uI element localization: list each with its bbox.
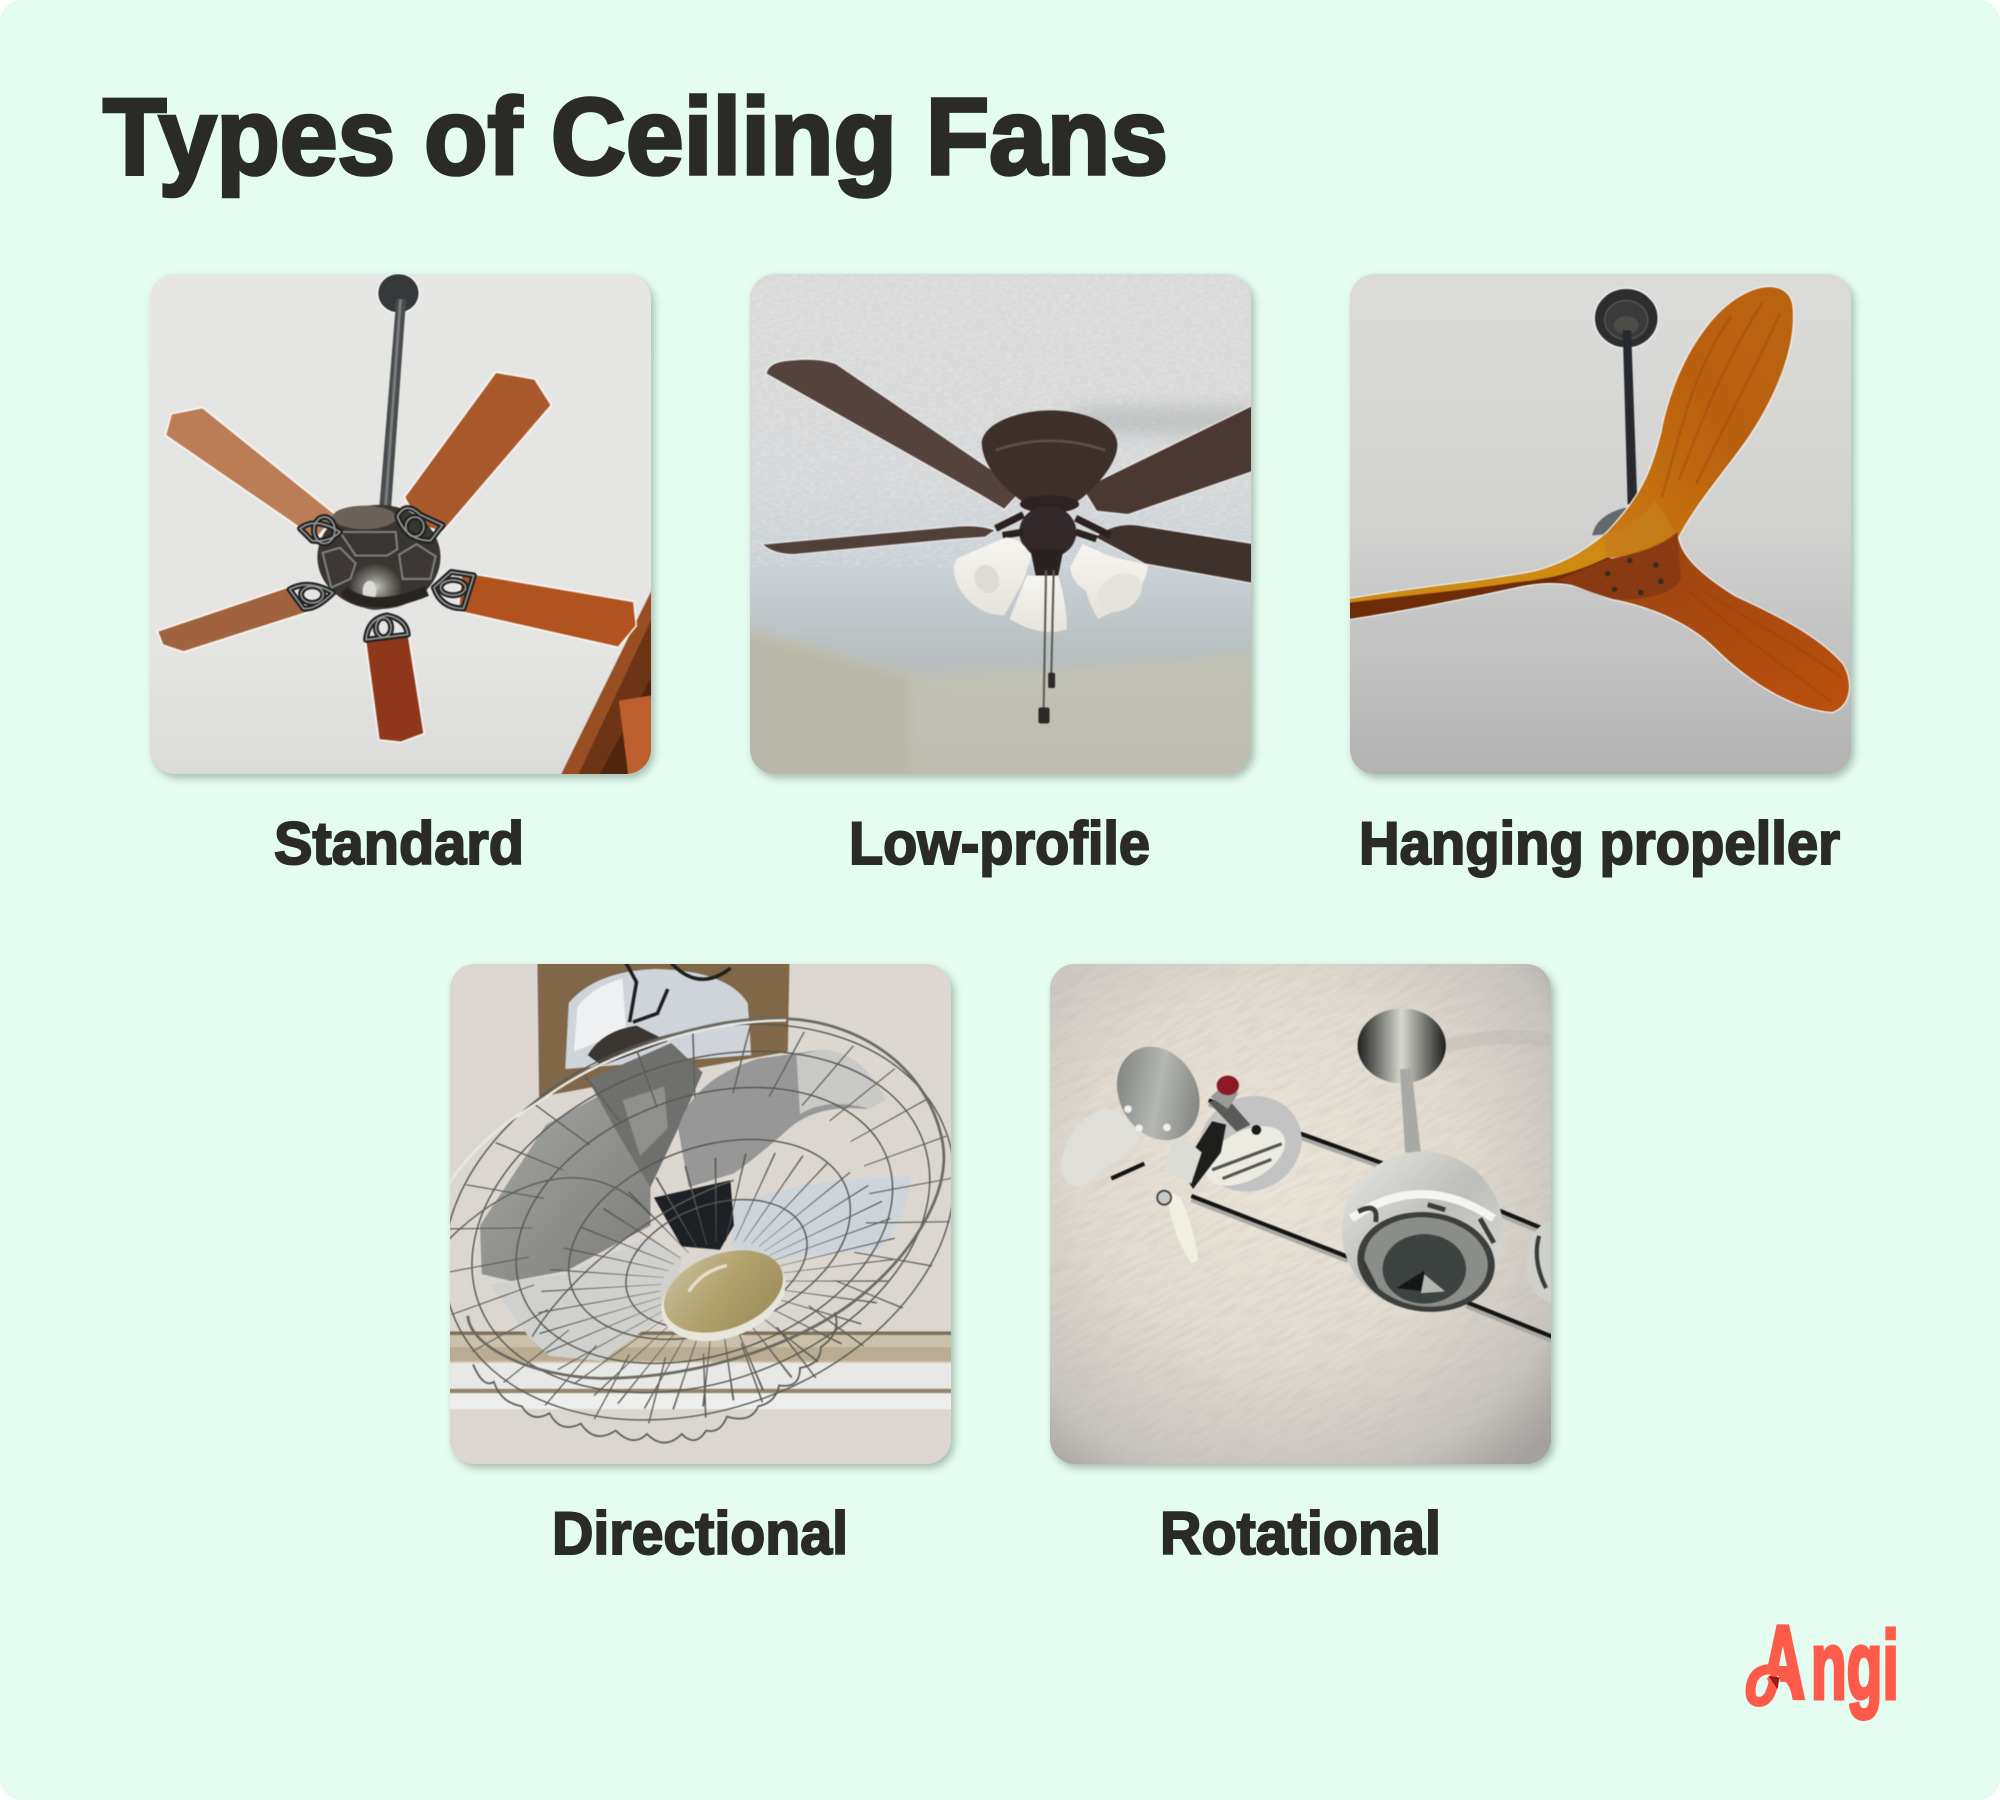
hub cap: [649, 1235, 798, 1357]
panel: directional fan: [448, 964, 958, 1567]
blades: [157, 372, 636, 742]
soft shadow on ceiling: [1076, 407, 1256, 435]
mounting screws: [1605, 558, 1664, 595]
photo: directional ceiling fan: [450, 964, 951, 1464]
label: Standard: Standard: [274, 810, 524, 877]
outer mesh wires: [440, 1004, 959, 1447]
blades: [762, 359, 1256, 584]
label: Low-profile: Low-profile: [849, 810, 1150, 877]
panel: rotational fan: [1048, 964, 1558, 1567]
wood grain: [1662, 303, 1843, 702]
propeller blades: [1345, 287, 1849, 712]
ceiling texture: [745, 268, 1256, 567]
wall: [742, 628, 1260, 782]
canopy and stem: [1358, 1008, 1556, 1152]
support bars: [1111, 1100, 1556, 1343]
mounting bracket: [537, 958, 790, 1097]
central motor: [1342, 1151, 1503, 1319]
fan blades: [480, 1043, 911, 1361]
ceiling beam: [559, 581, 656, 779]
motor housing: [317, 505, 440, 610]
label: Directional: Directional: [552, 1500, 848, 1567]
blade brackets: [290, 508, 474, 640]
ceiling trim: [445, 1331, 956, 1409]
panel: hanging propeller fan: [1348, 274, 1858, 878]
label: Hanging propeller: Hanging propeller: [1359, 810, 1840, 877]
canopy and downrod: [1592, 288, 1658, 535]
motor housing: [982, 410, 1117, 575]
logo: Angi: [1746, 1620, 1899, 1721]
light shades: [954, 537, 1149, 632]
downrod and canopy: [378, 273, 419, 508]
radial wires: [575, 1166, 858, 1396]
wall texture: [788, 700, 1812, 1723]
wire guard: [388, 956, 1010, 1488]
propeller blades: [1061, 1032, 1216, 1264]
panel: low-profile fan: [748, 274, 1258, 878]
second motor at edge: [1525, 1221, 1584, 1303]
photo: low-profile ceiling fan: [750, 274, 1251, 774]
photo: rotational ceiling fan: [1050, 964, 1551, 1464]
pull chains: [1038, 570, 1055, 724]
label: Rotational: Rotational: [1160, 1500, 1441, 1567]
photo: standard ceiling fan: [150, 274, 651, 774]
propeller motor: [1163, 1079, 1318, 1208]
photo: hanging propeller ceiling fan: [1350, 274, 1851, 774]
red indicator light: [1210, 1076, 1239, 1109]
panel: standard fan: [148, 274, 658, 877]
